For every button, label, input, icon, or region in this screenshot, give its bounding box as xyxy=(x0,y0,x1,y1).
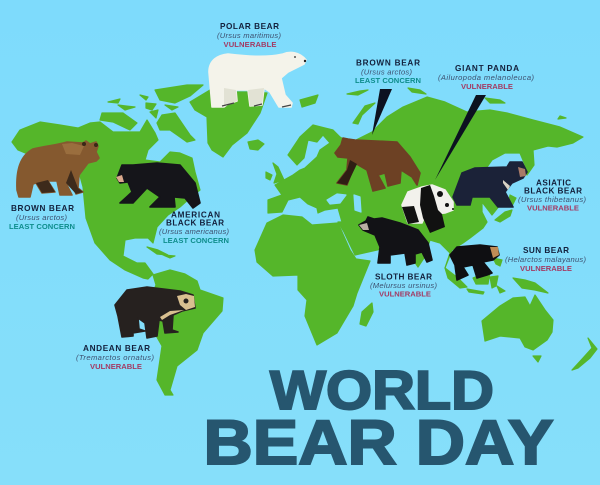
title: World Bear Day: WORLD xyxy=(270,359,494,421)
label: brown bear, North America: BROWN BEAR xyxy=(11,204,74,213)
continent: Africa xyxy=(255,215,370,345)
label: brown bear, Eurasia: (Ursus arctos) xyxy=(361,68,412,76)
label: giant panda xyxy=(438,64,534,91)
label: sun bear: VULNERABLE xyxy=(520,264,572,273)
bear: sloth bear xyxy=(359,217,432,265)
Southeast Asia islands xyxy=(445,258,505,294)
label: Asiatic black bear: ASIATIC xyxy=(536,178,571,188)
bear: sun bear xyxy=(450,245,499,280)
label: brown bear, North America: LEAST CONCERN xyxy=(9,222,75,231)
label: polar bear xyxy=(217,22,281,49)
continent: South America xyxy=(150,270,223,395)
Arctic Russia islands xyxy=(300,88,566,124)
bear: American black bear xyxy=(116,163,200,208)
label: giant panda: VULNERABLE xyxy=(461,82,513,91)
label: Asiatic black bear: BLACK BEAR xyxy=(524,186,582,196)
continent: Eurasia xyxy=(268,97,583,268)
pointer: giant panda xyxy=(435,95,486,180)
label: American black bear: LEAST CONCERN xyxy=(163,236,229,245)
label: Andean bear: (Tremarctos ornatus) xyxy=(76,353,154,362)
label: sun bear: SUN BEAR xyxy=(523,246,569,255)
label: polar bear: VULNERABLE xyxy=(224,40,276,49)
label: polar bear: POLAR BEAR xyxy=(220,22,279,31)
label: brown bear, North America: (Ursus arctos) xyxy=(16,213,67,222)
label: sloth bear: SLOTH BEAR xyxy=(375,272,432,282)
label: Andean bear: VULNERABLE xyxy=(90,362,142,371)
Black Sea and Baltic xyxy=(327,194,361,212)
arctic islands xyxy=(100,85,203,142)
title: World Bear Day: BEAR DAY xyxy=(204,408,554,478)
label: Asiatic black bear xyxy=(518,178,586,212)
label: sloth bear: (Melursus ursinus) xyxy=(370,281,437,290)
label: Asiatic black bear: (Ursus thibetanus) xyxy=(518,195,586,204)
bear: giant panda xyxy=(402,185,454,233)
label: Asiatic black bear: VULNERABLE xyxy=(527,204,579,212)
bear: Andean bear xyxy=(115,287,195,338)
Japan xyxy=(495,195,516,222)
title: World Bear Day xyxy=(204,359,554,478)
bear: polar bear xyxy=(209,52,306,107)
bear: brown bear, North America xyxy=(17,141,99,197)
Central American islands xyxy=(147,247,175,258)
bear: Asiatic black bear xyxy=(453,162,527,207)
label: sun bear xyxy=(505,246,586,273)
label: sloth bear xyxy=(370,272,437,298)
label: brown bear, Eurasia: BROWN BEAR xyxy=(356,58,420,68)
label: polar bear: (Ursus maritimus) xyxy=(217,31,281,40)
label: American black bear: (Ursus americanus) xyxy=(159,227,229,236)
label: Andean bear: ANDEAN BEAR xyxy=(83,344,150,353)
continent: Australia xyxy=(482,295,553,350)
label: brown bear, Eurasia: LEAST CONCERN xyxy=(355,76,421,85)
continent: Greenland xyxy=(190,90,267,157)
continent: North America xyxy=(12,120,200,279)
pointer: brown bear xyxy=(372,89,392,135)
world map xyxy=(12,85,597,395)
label: giant panda: GIANT PANDA xyxy=(455,64,519,73)
bear: brown bear, Eurasia xyxy=(335,138,420,191)
New Guinea xyxy=(513,278,548,293)
label: brown bear, Eurasia xyxy=(355,58,421,85)
label: brown bear, North America xyxy=(9,204,75,231)
Iceland and UK xyxy=(248,140,284,183)
label: sloth bear: VULNERABLE xyxy=(379,290,431,298)
label: American black bear xyxy=(159,210,229,245)
label: giant panda: (Ailuropoda melanoleuca) xyxy=(438,73,534,82)
label: American black bear: AMERICAN xyxy=(171,210,220,220)
Madagascar xyxy=(360,303,373,326)
label: sun bear: (Helarctos malayanus) xyxy=(505,255,586,264)
label: American black bear: BLACK BEAR xyxy=(166,218,224,228)
label: Andean bear xyxy=(76,344,154,371)
Tasmania and New Zealand xyxy=(533,338,597,370)
